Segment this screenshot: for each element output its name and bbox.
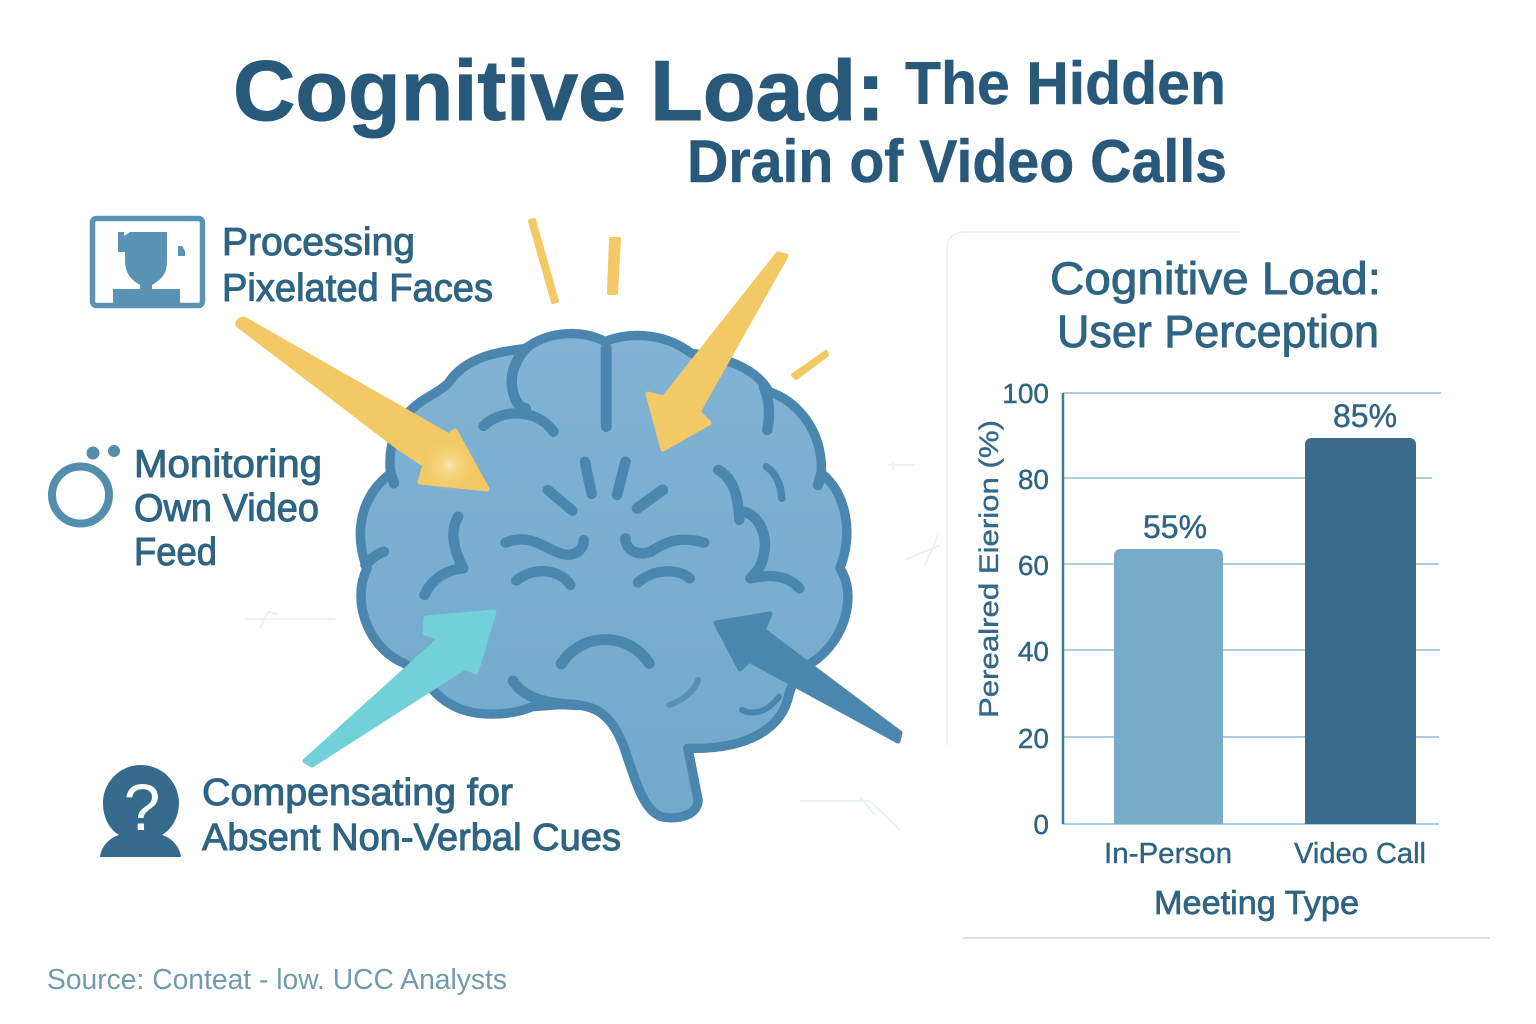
x axis labels: In-Person <box>1104 838 1232 870</box>
arrow: dark blue from right <box>716 614 900 741</box>
label: compensating for absent non-verbal cues: Compensating for <box>202 772 513 814</box>
icon: pixelated face on screen <box>92 218 202 307</box>
bar chart <box>974 378 1441 921</box>
x axis title: Meeting Type <box>1154 884 1359 921</box>
icon: stressed brain <box>360 334 848 818</box>
label: compensating for absent non-verbal cues: Absent Non-Verbal Cues <box>202 817 621 859</box>
y axis title: Perealred Eierion (%) <box>974 420 1004 718</box>
arrow: yellow from top right <box>648 254 786 449</box>
title: The Hidden <box>905 50 1226 117</box>
label: processing pixelated faces: Pixelated Faces <box>222 267 493 310</box>
bar chart: 80 <box>1018 464 1049 495</box>
bar: video call 85% <box>1305 398 1416 824</box>
label: monitoring own video feed: Own Video <box>134 487 319 530</box>
panel: compensating for absent cues <box>100 765 621 859</box>
decorative yellow rays <box>530 220 827 378</box>
title <box>233 44 1227 195</box>
bar chart: 0 <box>1033 809 1049 840</box>
panel: monitoring own video feed <box>52 443 322 574</box>
panel: chart cognitive load user perception <box>947 232 1490 938</box>
bar: in-person 55% <box>1114 509 1223 824</box>
faint smudges <box>245 462 940 830</box>
arrow: yellow to brain from pixelated faces <box>238 319 487 493</box>
title: Drain of Video Calls <box>687 128 1227 195</box>
bar: in-person 55%: 55% <box>1143 509 1207 545</box>
icon: head with question mark <box>100 765 181 857</box>
bar chart: 20 <box>1018 723 1049 754</box>
label: monitoring own video feed: Monitoring <box>134 443 322 486</box>
bar chart: 100 <box>1002 378 1049 409</box>
chart title: User Perception <box>1057 306 1379 357</box>
title: Cognitive Load: <box>233 44 885 139</box>
bar: video call 85%: 85% <box>1333 398 1397 434</box>
arrow: cyan from non-verbal cues <box>305 612 494 765</box>
bar chart: 40 <box>1018 636 1049 667</box>
label: processing pixelated faces: Processing <box>222 221 415 264</box>
panel: processing pixelated faces <box>92 218 493 310</box>
x axis labels <box>1104 838 1426 870</box>
bar chart: 60 <box>1018 550 1049 581</box>
chart title: Cognitive Load: <box>1050 253 1381 304</box>
icon: self-view ring with dots <box>52 445 120 524</box>
icon: head with question mark: ? <box>124 770 160 844</box>
label: monitoring own video feed: Feed <box>134 531 217 574</box>
source note: Source: Conteat - low. UCC Analysts <box>47 964 507 996</box>
x axis labels: Video Call <box>1294 838 1426 870</box>
